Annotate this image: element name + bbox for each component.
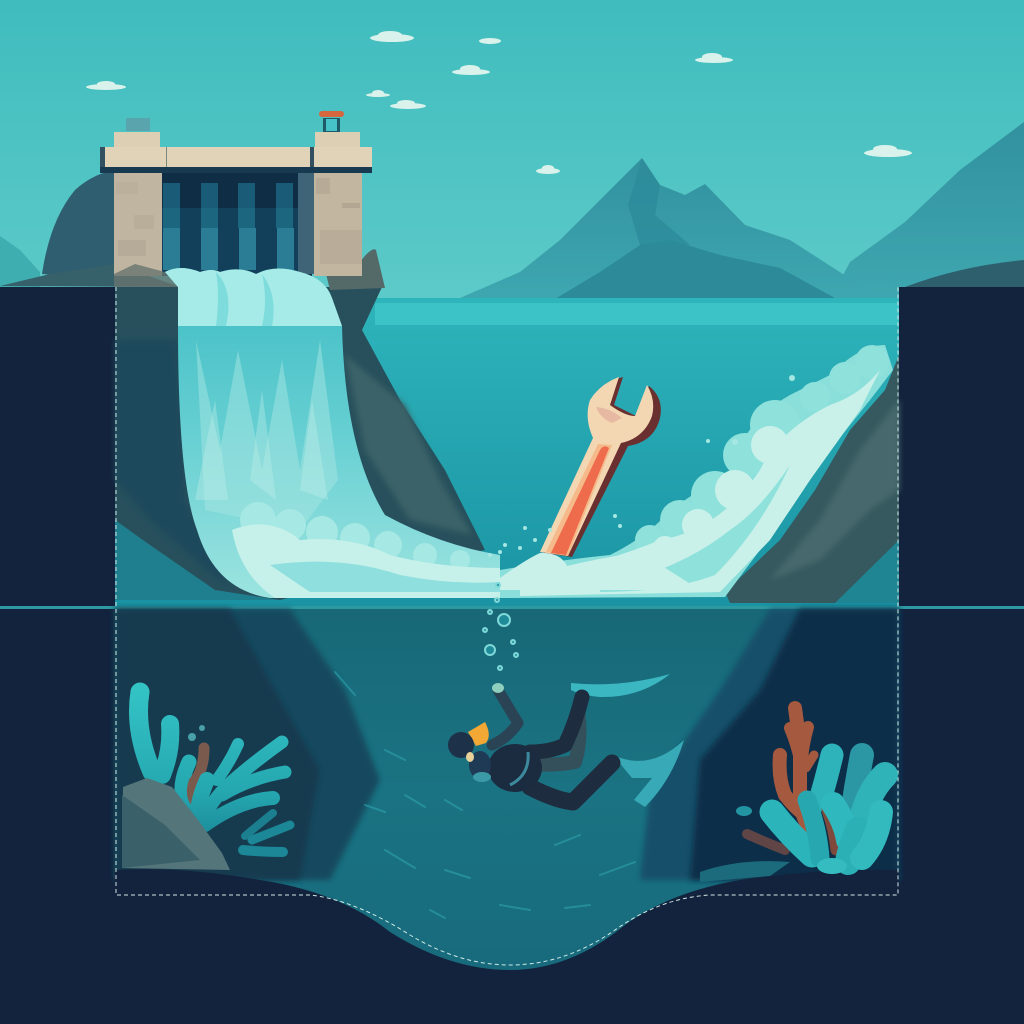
fins <box>571 674 684 807</box>
mountains <box>0 122 1024 302</box>
underwater section <box>115 609 899 974</box>
right cliff <box>725 355 899 603</box>
dam top beam <box>100 132 372 173</box>
wrench <box>540 377 661 557</box>
right coral <box>700 708 885 882</box>
left cliff <box>115 287 485 600</box>
glove <box>492 683 504 693</box>
rock at dam base <box>114 264 178 287</box>
right wave <box>500 345 893 598</box>
legs <box>530 697 612 802</box>
upper water <box>115 298 899 608</box>
torso <box>488 744 542 792</box>
orange machine <box>319 111 344 132</box>
left rock <box>122 778 230 870</box>
air tank <box>468 722 489 746</box>
control hut <box>126 118 150 131</box>
left coral <box>122 692 290 870</box>
sea floor basin <box>115 869 899 1024</box>
belt <box>510 752 528 785</box>
wave foam over wrench base <box>500 552 700 590</box>
bubbles column <box>483 583 518 670</box>
head <box>448 732 474 758</box>
foam scallops <box>240 502 470 570</box>
sky <box>0 0 1024 300</box>
waterfall <box>165 268 500 598</box>
rock behind dam <box>42 170 118 280</box>
dam right pillar <box>314 172 362 276</box>
raised arm <box>492 690 518 745</box>
dam left pillar <box>114 172 162 276</box>
spray droplets <box>488 375 795 557</box>
clouds <box>86 31 912 174</box>
scuba diver <box>448 674 684 807</box>
dashed outline <box>116 287 898 965</box>
dam <box>100 111 372 276</box>
waterline highlight <box>0 606 1024 609</box>
water specks <box>335 672 635 918</box>
right shore top <box>905 260 1024 290</box>
dam gates <box>162 168 315 276</box>
dark side panels <box>0 287 1024 1024</box>
